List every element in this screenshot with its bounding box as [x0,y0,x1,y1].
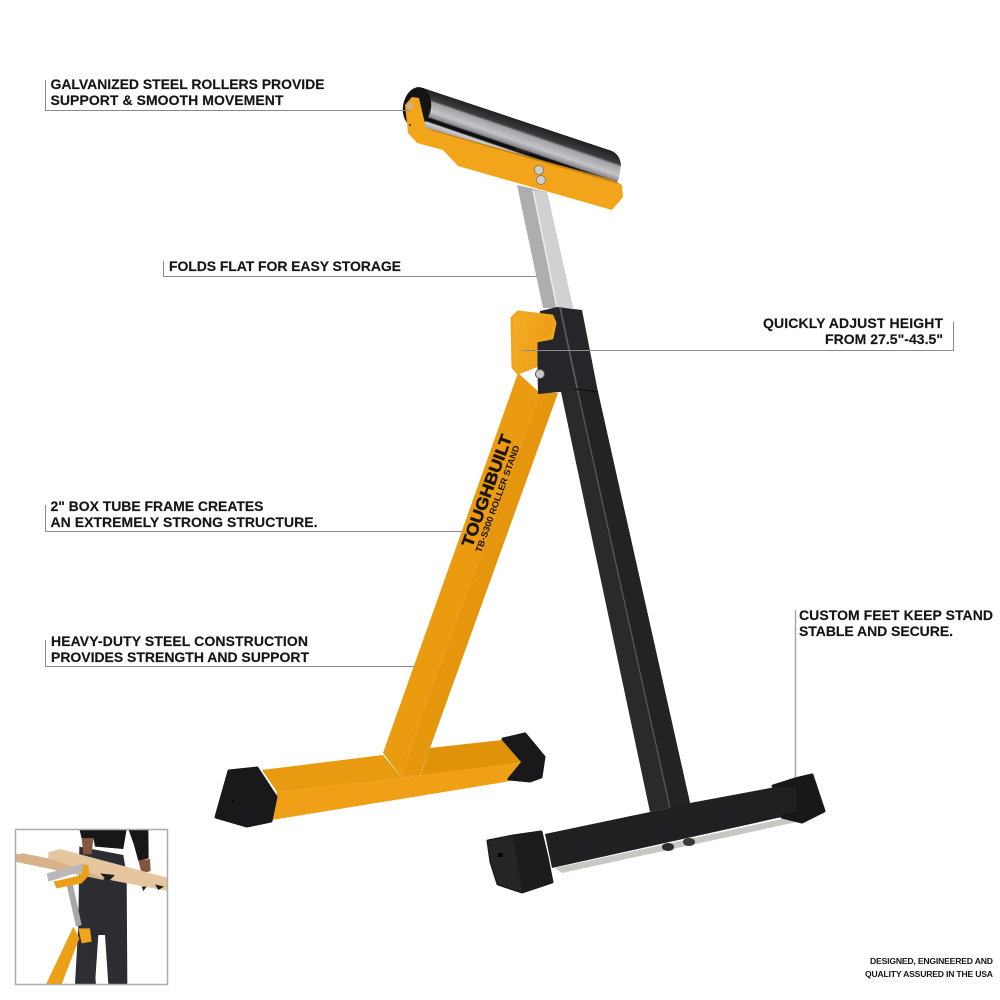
person: trousers [75,847,127,984]
person: hands [82,838,93,854]
callout: adjust height: QUICKLY ADJUST HEIGHT [763,315,943,331]
right black foot [773,775,824,822]
left black foot [488,832,552,892]
callout: adjust height: FROM 27.5"-43.5" [825,331,943,347]
roller [400,85,621,182]
callout: folds flat [164,258,537,276]
yellow clamp handle [512,312,555,373]
footer note [865,956,993,979]
yellow roller bracket [405,97,623,210]
callout: heavy-duty steel [46,633,415,666]
callout: box tube frame [46,498,462,532]
right yellow foot [503,734,544,781]
galvanized post [517,185,573,308]
yellow base with feet [216,734,544,826]
callout: folds flat: FOLDS FLAT FOR EASY STORAGE [169,258,401,274]
inset black leg [78,928,96,984]
callout: heavy-duty steel: HEAVY-DUTY STEEL CONSTRUCTION [51,633,308,649]
black sleeve [536,307,598,394]
black rear leg [561,392,690,812]
inset handle [78,928,92,943]
inset roller [47,863,86,882]
callout: box tube frame: 2" BOX TUBE FRAME CREATES [50,498,264,514]
inset post [67,883,82,927]
inset photo: stand in use [15,829,167,984]
footer note: DESIGNED, ENGINEERED AND [870,956,993,966]
footer note: QUALITY ASSURED IN THE USA [865,969,993,979]
callout: custom feet [796,607,993,777]
callout: heavy-duty steel: PROVIDES STRENGTH AND SUPPORT [51,649,309,665]
yellow leg [383,373,558,778]
yellow leg: TB-S300 ROLLER STAND [473,444,522,554]
inset yellow leg [46,927,79,984]
inset bracket [53,864,89,888]
person: shirt and arms [79,829,127,849]
callout: galvanized rollers: GALVANIZED STEEL ROLLERS PROVIDE [50,76,324,92]
callout: custom feet: STABLE AND SECURE. [799,623,953,639]
brand text on leg: TOUGHBUILT [459,432,516,549]
callout: galvanized rollers: SUPPORT & SMOOTH MOVEMENT [50,92,284,108]
callout: galvanized rollers [46,76,410,110]
wood planks [15,853,107,880]
left yellow foot [216,768,276,826]
callout: box tube frame: AN EXTREMELY STRONG STRUCTURE. [50,514,318,530]
product: roller stand [216,85,824,892]
black base with feet [488,775,824,892]
callout: adjust height [522,315,954,350]
callout: custom feet: CUSTOM FEET KEEP STAND [799,607,993,623]
